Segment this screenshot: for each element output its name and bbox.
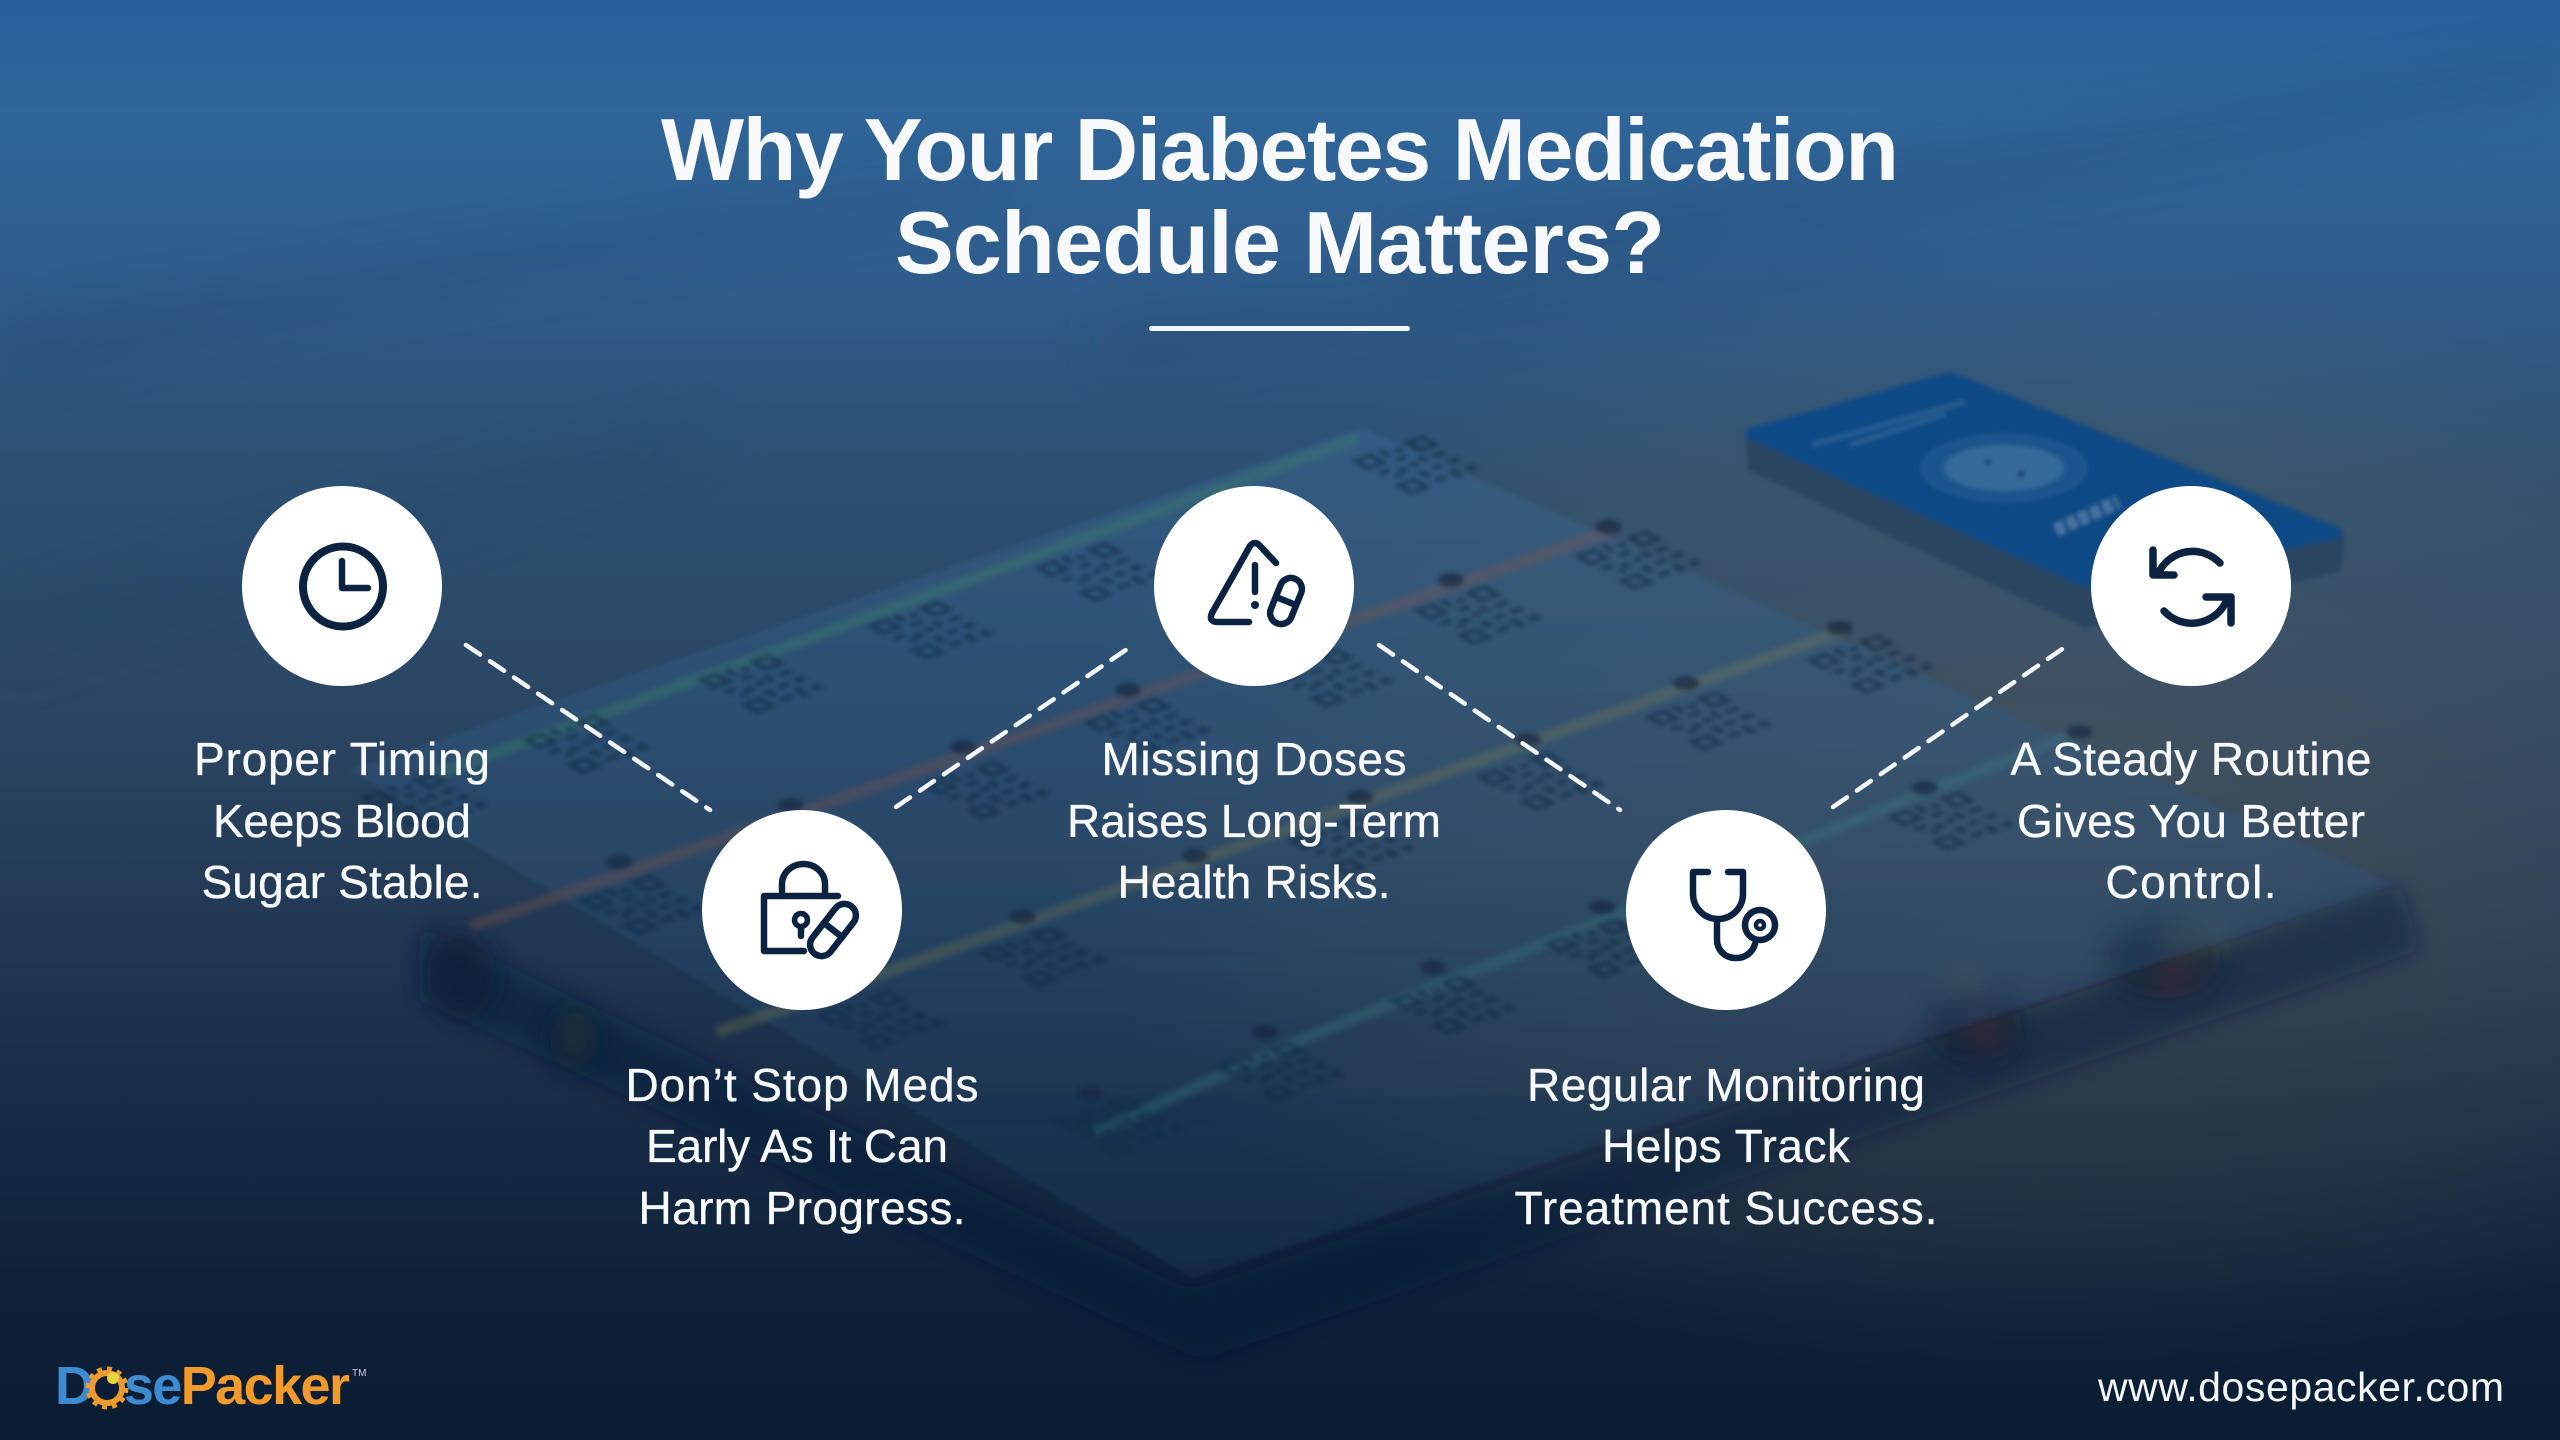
step 4: regular monitoring [1514, 810, 1938, 1234]
step 2: don't stop meds [626, 810, 978, 1234]
text: steady routine: Control. [2106, 856, 2276, 908]
step 3: missing doses [1067, 486, 1441, 908]
dashed connector: lock to warning [896, 645, 1133, 807]
title: Schedule Matters? [895, 193, 1665, 292]
logo: DosePacker: TM [352, 1368, 366, 1379]
step 1: proper timing [194, 486, 490, 908]
icon: stethoscope [1626, 810, 1826, 1010]
title: Why Your Diabetes Medication [661, 100, 1899, 199]
text: regular monitoring: Treatment Success. [1514, 1182, 1938, 1234]
text: missing doses: Missing Doses [1102, 733, 1406, 785]
text: proper timing: Keeps Blood [213, 795, 471, 847]
icon: warning triangle with pill [1154, 486, 1354, 686]
text: missing doses: Health Risks. [1118, 856, 1390, 908]
text: don't stop meds: Harm Progress. [638, 1182, 966, 1234]
text: regular monitoring: Regular Monitoring [1527, 1059, 1925, 1111]
icon: clock [242, 486, 442, 686]
title underline [1149, 326, 1410, 331]
dashed connector: clock to lock [466, 645, 710, 810]
text: regular monitoring: Helps Track [1602, 1120, 1851, 1172]
text: proper timing: Sugar Stable. [202, 856, 482, 908]
text: don't stop meds: Don’t Stop Meds [626, 1059, 978, 1111]
text: proper timing: Proper Timing [194, 733, 490, 785]
text: don't stop meds [626, 1059, 978, 1234]
logo: DosePacker: DosePacker [55, 1356, 350, 1416]
text: don't stop meds: Early As It Can [646, 1120, 948, 1172]
text: steady routine [2010, 733, 2372, 908]
dashed connector: stethoscope to sync [1833, 645, 2068, 807]
icon: sync arrows [2091, 486, 2291, 686]
icon: lock with pill [702, 810, 902, 1010]
text: steady routine: A Steady Routine [2010, 733, 2372, 785]
text: proper timing [194, 733, 490, 908]
step 5: steady routine [2010, 486, 2372, 908]
phone [1745, 378, 2345, 628]
text: steady routine: Gives You Better [2017, 795, 2365, 847]
title [661, 100, 1899, 292]
dashed connector: warning to stethoscope [1379, 645, 1620, 810]
website url: www.dosepacker.com [2097, 1364, 2504, 1410]
text: missing doses: Raises Long-Term [1067, 795, 1441, 847]
text: regular monitoring [1514, 1059, 1938, 1234]
text: missing doses [1067, 733, 1441, 908]
